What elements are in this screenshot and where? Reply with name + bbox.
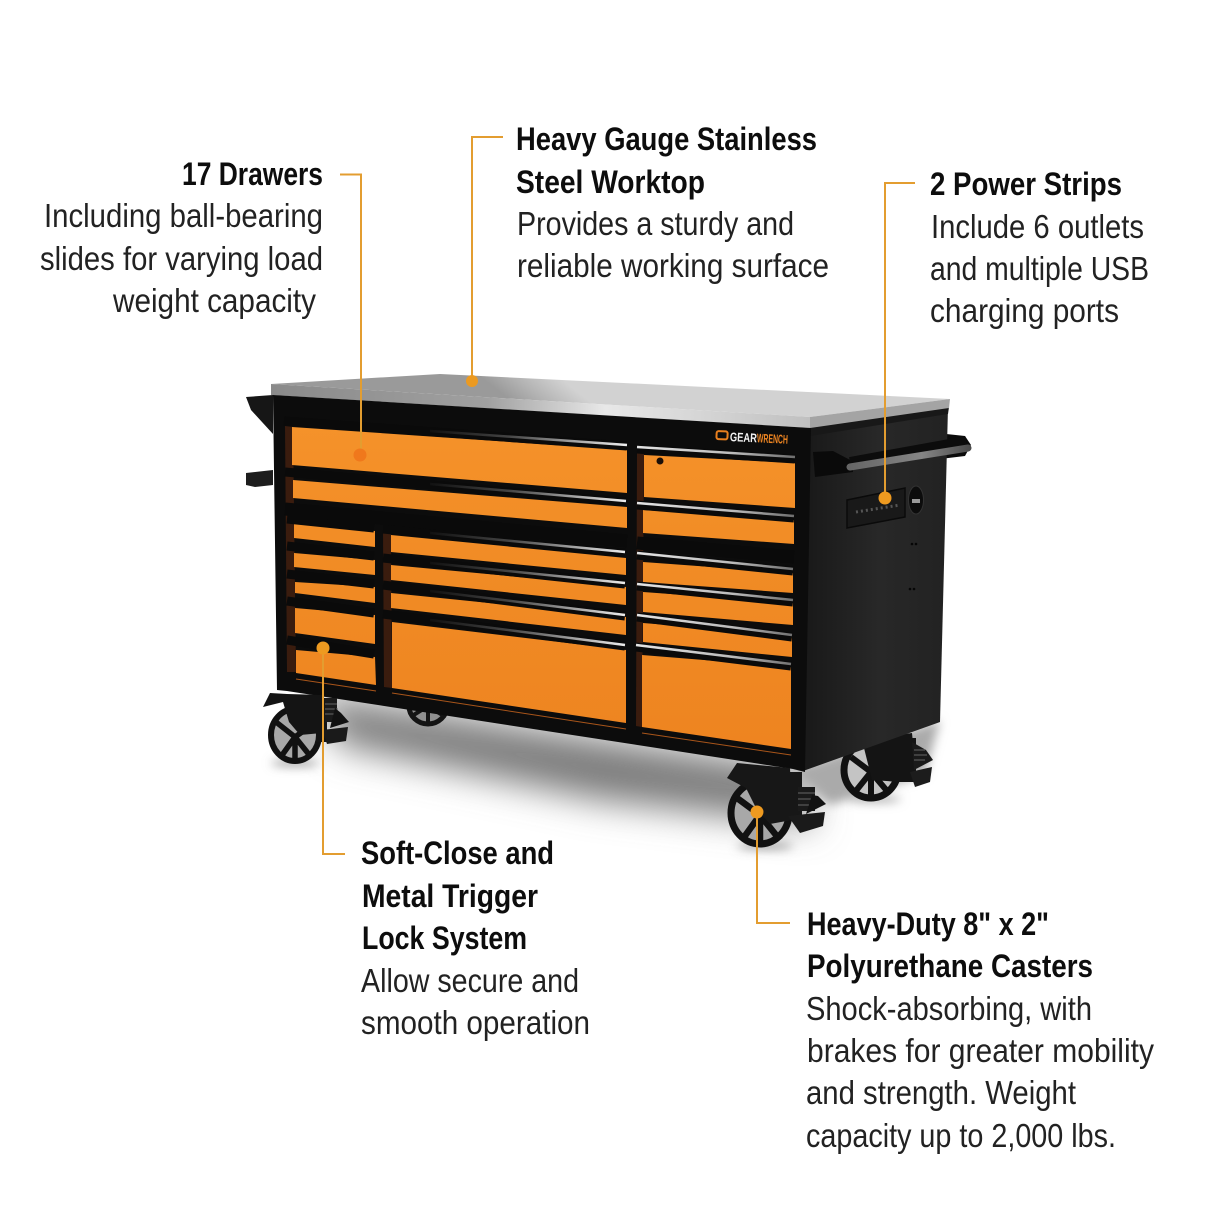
drawers: left bank: [292, 427, 627, 685]
heading: casters: Polyurethane Casters: [807, 948, 1093, 984]
body: worktop: Provides a sturdy and: [517, 205, 794, 242]
front left caster: [263, 693, 349, 761]
heading: worktop: Heavy Gauge Stainless: [516, 121, 817, 157]
body: lock system: Allow secure and: [361, 962, 579, 999]
heading: lock system: [361, 835, 554, 956]
heading: 17 drawers: 17 Drawers: [182, 156, 323, 192]
GEARWRENCH logo: GEAR: [730, 430, 757, 445]
GEARWRENCH logo: WRENCH: [757, 431, 788, 447]
leader: lock system: [323, 650, 345, 854]
USB port: [908, 486, 924, 514]
body: casters: capacity up to 2,000 lbs.: [806, 1117, 1116, 1154]
callout: casters: [806, 906, 1154, 1154]
callout: worktop: [516, 121, 829, 284]
body: power strips: [930, 208, 1149, 329]
stainless steel worktop: [271, 374, 950, 428]
heading: worktop: [516, 121, 817, 200]
floor shadow: [271, 695, 940, 849]
body: 17 drawers: [40, 197, 323, 319]
callout: power strips: [930, 166, 1149, 329]
GEARWRENCH logo: [716, 429, 788, 447]
drawers: middle bank: [391, 535, 626, 723]
heading: worktop: Steel Worktop: [516, 164, 705, 200]
leader: 17 drawers: [340, 174, 361, 452]
marker: casters: [750, 806, 764, 818]
rear middle caster: [409, 688, 447, 724]
left side shelf: [246, 395, 273, 487]
leader: casters: [757, 815, 790, 923]
bottom rail accent: [296, 679, 791, 755]
heading: lock system: Soft-Close and: [361, 835, 554, 871]
rear right caster: [844, 733, 933, 798]
side handle back rail: [820, 433, 971, 475]
body: power strips: Include 6 outlets: [931, 208, 1144, 245]
heading: lock system: Lock System: [362, 920, 527, 956]
body: casters: and strength. Weight: [806, 1074, 1076, 1111]
cabinet front frame: [273, 395, 811, 772]
heading: casters: Heavy-Duty 8" x 2": [807, 906, 1049, 942]
body: lock system: smooth operation: [361, 1004, 590, 1041]
heading: lock system: Metal Trigger: [362, 878, 538, 914]
brown inner reflections: [285, 426, 644, 727]
heading: casters: [807, 906, 1093, 984]
body: casters: brakes for greater mobility: [807, 1032, 1154, 1069]
cabinet side panel: [803, 407, 949, 771]
callout: lock system: [361, 835, 590, 1041]
lock hole: [656, 458, 664, 464]
power strip panel: [847, 488, 905, 528]
body: lock system: [361, 962, 590, 1041]
marker: power strips: [878, 492, 892, 504]
marker: 17 drawers: [354, 448, 366, 462]
front right caster: [727, 763, 826, 845]
body: 17 drawers: slides for varying load: [40, 240, 323, 277]
leader: worktop: [472, 137, 503, 380]
heading: power strips: 2 Power Strips: [930, 166, 1122, 202]
marker: worktop: [466, 375, 478, 387]
body: power strips: and multiple USB: [930, 250, 1149, 287]
marker: lock system: [316, 642, 330, 654]
body: power strips: charging ports: [930, 292, 1119, 329]
drawer handles: [284, 421, 795, 666]
body: 17 drawers: weight capacity: [112, 282, 316, 319]
leader: power strips: [885, 183, 915, 495]
body: worktop: [517, 205, 829, 284]
body: casters: Shock-absorbing, with: [806, 990, 1092, 1027]
body: worktop: reliable working surface: [517, 247, 829, 284]
drawers: right bank: [642, 455, 795, 749]
callout: 17 drawers: [40, 156, 323, 319]
side handle: [813, 441, 968, 477]
body: 17 drawers: Including ball-bearing: [44, 197, 323, 234]
body: casters: [806, 990, 1154, 1154]
